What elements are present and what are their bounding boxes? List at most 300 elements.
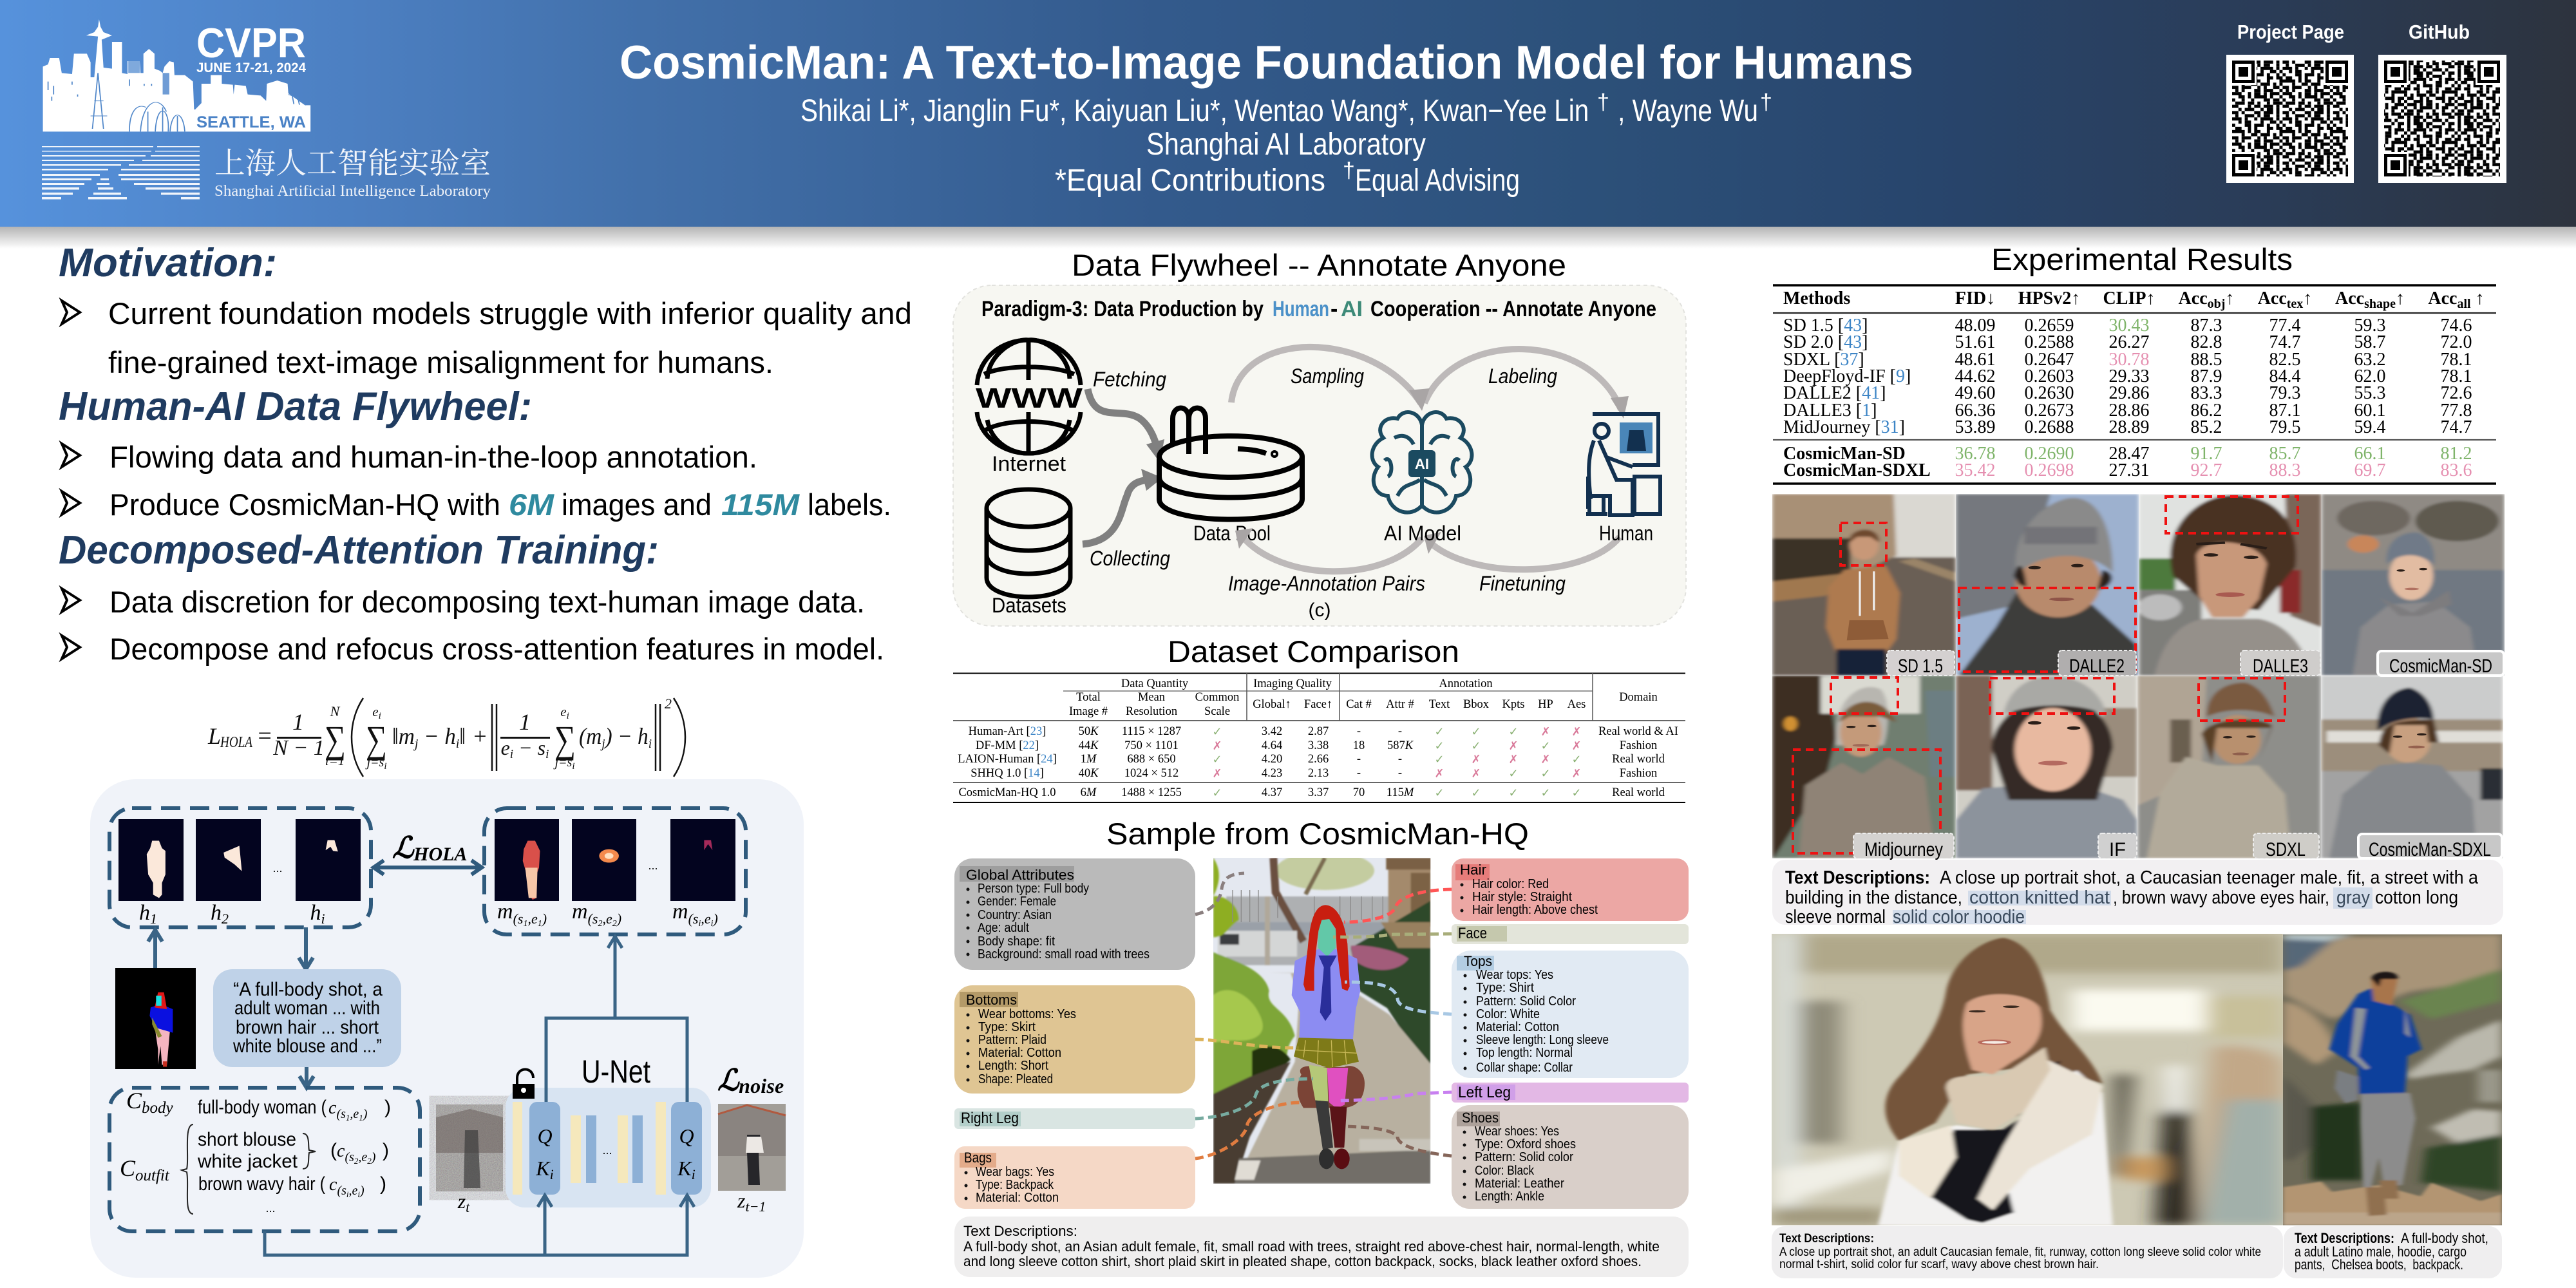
formula: L_HOLA (207, 696, 685, 777)
results rows: 29.86 (2108, 383, 2150, 403)
u-net block: Q (679, 1124, 694, 1148)
method labels: DALLE3 (2253, 656, 2308, 677)
table check and cross marks (1212, 725, 1582, 800)
method labels: SDXL (2266, 839, 2306, 860)
table body: 115M (1387, 786, 1415, 799)
table check and cross marks: ✓ (1471, 725, 1481, 739)
box: global attributes: Country: Asian (978, 908, 1052, 922)
box: global attributes: Background: small road with trees (978, 947, 1150, 961)
box: comparison text description: cotton long (2375, 887, 2458, 908)
table check and cross marks: ✗ (1212, 739, 1222, 753)
table body: 50K (1079, 725, 1099, 738)
dashed box: conditions: C (120, 1155, 135, 1181)
table body: 750 × 1101 (1124, 739, 1179, 752)
bullet: decompose: Decompose and refocus cross-attention features in model. (109, 632, 884, 666)
results rows: 49.60 (1955, 383, 1995, 403)
table body: LAION-Human [24] (958, 753, 1057, 766)
method labels (1853, 650, 2504, 860)
formula: L_HOLA: i (384, 761, 387, 772)
bullet: foundation models: fine-grained text-image misalignment for humans. (108, 345, 773, 379)
formula: L_HOLA: HOLA (220, 734, 252, 751)
formula: L_HOLA: e (501, 736, 510, 759)
caption bubble: “A full-body shot, a (233, 979, 383, 1000)
table check and cross marks: ✓ (1540, 767, 1551, 781)
Shanghai AI Lab logo (42, 146, 491, 200)
table check and cross marks: ✓ (1212, 725, 1222, 739)
QR: project page (2226, 21, 2354, 183)
results rows: 79.3 (2269, 383, 2300, 403)
segmentation map (115, 968, 196, 1069)
results rows: 48.09 (1955, 316, 1995, 336)
table header: Mean (1138, 691, 1165, 704)
formula: L_HOLA: ) − h (604, 723, 649, 749)
table body: CosmicMan-HQ 1.0 (958, 786, 1056, 799)
results rows: 78.1 (2441, 366, 2472, 386)
formula: L_HOLA: j (600, 737, 605, 751)
table body: Real world (1612, 786, 1665, 799)
dashed box: conditions: brown wavy hair ( (198, 1173, 325, 1195)
formula: L_HOLA: 1 (519, 709, 531, 735)
heading: data flywheel: Data Flywheel -- Annotate Anyone (1072, 248, 1566, 282)
u-net block: K (536, 1157, 550, 1180)
photo: z_t-1: t−1 (745, 1198, 766, 1215)
u-net block: Q (537, 1124, 553, 1148)
box: face: Face (1458, 925, 1487, 942)
table check and cross marks: ✗ (1571, 725, 1582, 739)
table check and cross marks: ✓ (1571, 753, 1582, 766)
table check and cross marks: ✓ (1212, 786, 1222, 800)
dashed box: attention maps (484, 808, 746, 934)
dashed box: attention maps: 2 (598, 919, 602, 929)
box: tops: Top length: Normal (1476, 1046, 1573, 1060)
table body: 6M (1081, 786, 1097, 799)
box: woman text description: A close up portrait shot, an adult Caucasian female, fit, runway, cotton long sleeve solid color white (1779, 1245, 2261, 1259)
table header: Imaging Quality (1253, 677, 1332, 690)
table check and cross marks: ✓ (1508, 786, 1519, 800)
results rows: 35.42 (1955, 460, 1995, 480)
results rows: 28.86 (2108, 401, 2150, 421)
formula: L_HOLA: e (560, 704, 567, 719)
results rows: 28.47 (2108, 444, 2150, 464)
bullet: flowing data: Flowing data and human-in-the-loop annotation. (109, 440, 757, 474)
table body: 1488 × 1255 (1121, 786, 1182, 799)
table header: Common (1195, 691, 1239, 704)
results rows: 74.7 (2441, 417, 2472, 437)
table body: 4.37 (1262, 786, 1282, 799)
box: global attributes: Person type: Full body (978, 882, 1089, 896)
QR: project page: Project Page (2237, 21, 2344, 43)
photo: woman with fur scarf (1772, 934, 2283, 1225)
table body: 688 × 650 (1127, 753, 1176, 766)
results rows: 85.2 (2191, 417, 2222, 437)
results header: all (2457, 297, 2471, 311)
dashed box: attention maps: ,e (602, 911, 612, 927)
table header (1069, 677, 1658, 718)
box: shoes (1452, 1105, 1689, 1209)
dashed box: conditions: 1 (346, 1113, 350, 1122)
maps h (118, 819, 361, 901)
box: sample text description: Text Descriptions: (963, 1223, 1077, 1239)
results rows: 0.2647 (2025, 350, 2074, 370)
paradigm title: Cooperation -- Annotate Anyone (1370, 297, 1656, 321)
results rows: 44.62 (1955, 366, 1995, 386)
bullet: foundation models: Current foundation models struggle with inferior quality and (108, 296, 912, 330)
results rows: 91.7 (2191, 444, 2222, 464)
results rows (1783, 316, 2472, 480)
paradigm title (981, 297, 1656, 321)
box: comparison text description: cotton knitted hat (1969, 887, 2110, 908)
arrow: double between maps (374, 860, 482, 875)
table header: Global↑ (1253, 698, 1291, 711)
results header: ↑ (2471, 289, 2485, 308)
results rows: 74.7 (2269, 332, 2300, 352)
arrow: maps to caption (299, 927, 313, 969)
results rows: 48.61 (1955, 350, 1995, 370)
equal contributions note: † (1343, 158, 1355, 183)
table check and cross marks: ✗ (1471, 767, 1481, 781)
table body: 4.23 (1262, 767, 1282, 780)
formula: L_HOLA: i (649, 737, 652, 751)
results header: FID↓ (1955, 289, 1995, 308)
results header: Acc (2335, 289, 2364, 308)
results rows: 78.1 (2441, 350, 2472, 370)
dashed box: conditions: c (337, 1141, 345, 1161)
photo: noisy z_t: z (458, 1189, 466, 1213)
box: woman text description (1772, 1226, 2283, 1278)
bullet: produce (62, 488, 891, 522)
table check and cross marks: ✓ (1508, 767, 1519, 781)
table check and cross marks: ✓ (1540, 786, 1551, 800)
portrait: CosmicMan-SDXL (2321, 676, 2503, 858)
table check and cross marks: ✓ (1471, 739, 1481, 753)
table body: SHHQ 1.0 [14] (971, 767, 1044, 780)
dashed box: attention maps: ) (712, 911, 718, 927)
dashed box: attention maps: i (711, 919, 714, 929)
box: tops: Color: White (1476, 1007, 1540, 1021)
results rows: CosmicMan-SDXL (1783, 460, 1931, 480)
heading: motivation: Motivation: (59, 241, 277, 285)
box: shoes: Type: Oxford shoes (1475, 1137, 1576, 1151)
table check and cross marks: ✗ (1571, 739, 1582, 753)
box: bottoms: Bottoms (966, 992, 1017, 1008)
dashed box: attention maps: m (497, 900, 513, 923)
table body: 40K (1079, 767, 1099, 780)
u-net block: K (677, 1157, 692, 1180)
box: tops: Material: Cotton (1476, 1020, 1559, 1034)
results rows: 30.78 (2108, 350, 2150, 370)
dashed box: human parsing maps: 1 (150, 911, 157, 927)
box: hair (1452, 858, 1689, 921)
table header: HP (1538, 698, 1553, 711)
results rows: 83.6 (2441, 460, 2472, 480)
box: shoes: Shoes (1462, 1110, 1499, 1126)
box: bottoms (954, 985, 1195, 1094)
bullet: produce: 6M (509, 488, 554, 522)
table: dataset comparison (953, 673, 1685, 802)
table header: Attr # (1386, 698, 1414, 711)
loop labels: Image-Annotation Pairs (1228, 572, 1425, 595)
table check and cross marks: ✗ (1540, 753, 1551, 766)
results header: HPSv2↑ (2018, 289, 2080, 308)
label: datasets: Datasets (992, 594, 1066, 617)
box: bottoms: Material: Cotton (978, 1046, 1061, 1060)
results rows: SD 2.0 [43] (1783, 332, 1868, 352)
box: man text description (2284, 1226, 2502, 1278)
results rows: SDXL [37] (1783, 350, 1864, 370)
table body: - (1357, 753, 1361, 766)
table check and cross marks: ✓ (1508, 725, 1519, 739)
box: left leg (1452, 1083, 1689, 1103)
box: man text description: a adult Latino male, hoodie, cargo (2295, 1244, 2467, 1260)
label: L_noise: ℒ (717, 1064, 739, 1097)
equal contributions note: Equal Advising (1355, 164, 1520, 198)
label: AI model: AI Model (1384, 522, 1461, 545)
table header: Domain (1619, 691, 1658, 704)
results header: Acc (2428, 289, 2457, 308)
formula: L_HOLA: i=1 (325, 753, 345, 768)
box: comparison text description (1772, 860, 2503, 927)
dashed box: conditions: ,e (349, 1184, 358, 1198)
icon: globe: WWW (976, 383, 1083, 414)
box: woman text description: Text Descriptions: (1779, 1232, 1874, 1245)
paradigm title: Paradigm-3: Data Production by (981, 297, 1264, 321)
dashed box: attention maps: ,e (701, 911, 711, 927)
table body: Human-Art [23] (969, 725, 1046, 738)
photo: z_t-1 (718, 1104, 786, 1215)
formula: L_HOLA: j=s (554, 755, 572, 770)
box: tops: Pattern: Solid Color (1476, 994, 1576, 1009)
lock icon (513, 1069, 535, 1099)
title: CosmicMan: A Text-to-Image Foundation Model for Humans (620, 37, 1913, 89)
table header: Image # (1069, 705, 1108, 718)
table header: Face↑ (1304, 698, 1332, 711)
method labels: SD 1.5 (1898, 656, 1943, 677)
label: internet: Internet (992, 452, 1066, 475)
table header: Aes (1567, 698, 1586, 711)
box: bags: Bags (964, 1150, 992, 1166)
results rows: 83.3 (2191, 383, 2222, 403)
box: shoes: Color: Black (1475, 1164, 1535, 1178)
box: shoes: Pattern: Solid color (1475, 1150, 1573, 1164)
label: L_HOLA loss: ℒ (392, 831, 413, 864)
label: fetching: Fetching (1093, 368, 1166, 391)
affiliation: Shanghai AI Laboratory (1146, 128, 1426, 162)
CVPR logo: CVPR (196, 19, 306, 66)
authors: Shikai Li*, Jianglin Fu*, Kaiyuan Liu*, Wentao Wang*, Kwan−Yee Lin , Wayne Wu (800, 94, 1758, 128)
formula: L_HOLA: i (510, 748, 513, 761)
loop labels: Labeling (1488, 365, 1557, 388)
results rows: SD 1.5 [43] (1783, 316, 1868, 336)
table body: - (1398, 725, 1402, 738)
dashed box: human parsing maps: i (321, 911, 325, 927)
header shadow (0, 227, 2576, 249)
dashed box: attention maps: ... (648, 859, 658, 872)
table check and cross marks: ✗ (1508, 753, 1519, 766)
heading: sample: Sample from CosmicMan-HQ (1106, 817, 1529, 851)
portrait: IF (1956, 676, 2137, 858)
dashed box: conditions: 2 (367, 1156, 372, 1166)
formula: L_HOLA: j (413, 737, 419, 751)
results rows: 0.2603 (2025, 366, 2074, 386)
icon: human annotator (1586, 414, 1660, 515)
portrait: DALLE2 (1956, 494, 2139, 676)
paradigm title: AI (1341, 297, 1363, 321)
box: tops: Collar shape: Collar (1476, 1061, 1573, 1075)
box: global attributes (954, 858, 1195, 970)
left column text (59, 241, 912, 666)
dashed box: attention maps: (s (513, 911, 523, 927)
dashed box: conditions: outfit (135, 1167, 170, 1184)
arrow: fetching (1088, 389, 1164, 462)
table body: 44K (1079, 739, 1099, 752)
bullet: foundation models (62, 296, 912, 379)
arrows: flywheel loop (1231, 347, 1629, 571)
formula: L_HOLA: ∑ (325, 718, 346, 761)
dashed box: conditions: i (346, 1189, 349, 1199)
dashed box: conditions: ) (359, 1184, 365, 1198)
results header: ↑ (2303, 289, 2312, 308)
dashed box: human parsing maps: h (139, 901, 150, 925)
dashed box: attention maps: m (572, 900, 588, 923)
results rows: 59.3 (2354, 316, 2385, 336)
box: bottoms: Type: Skirt (978, 1020, 1036, 1034)
table body: Fashion (1620, 767, 1657, 780)
box: bottoms: Shape: Pleated (978, 1072, 1053, 1086)
label: L_noise: noise (739, 1074, 784, 1097)
dashed box: conditions: C (126, 1088, 142, 1113)
formula: L_HOLA: ∑ (554, 718, 576, 761)
dashed box: attention maps: 1 (523, 919, 527, 929)
table check and cross marks: ✗ (1434, 767, 1444, 781)
label: data pool: Data Pool (1193, 522, 1271, 545)
dashed box: conditions: ) (384, 1097, 391, 1118)
dashed box: conditions: (s (337, 1184, 346, 1198)
results rows: 86.2 (2191, 401, 2222, 421)
results rows: 74.6 (2441, 316, 2472, 336)
results rows: 82.8 (2191, 332, 2222, 352)
results rows: 0.2659 (2025, 316, 2074, 336)
box: hair: Hair color: Red (1472, 877, 1549, 891)
bullet: produce: images and (562, 488, 712, 522)
box: shoes: Material: Leather (1475, 1177, 1564, 1191)
formula: L_HOLA: ‖ (459, 723, 466, 749)
box: face (1452, 924, 1689, 944)
table body: Real world (1612, 753, 1665, 766)
results rows: MidJourney [31] (1783, 417, 1905, 437)
box: man text description: pants, Chelsea boots, backpack. (2295, 1256, 2463, 1273)
results rows: 0.2588 (2025, 332, 2074, 352)
box: tops: Sleeve length: Long sleeve (1476, 1033, 1609, 1047)
portrait: Midjourney (1772, 676, 1956, 858)
dashed box: attention maps: ,e (527, 911, 538, 927)
box: comparison text description: , brown wavy above eyes hair, (2113, 887, 2329, 908)
box: sample text description (954, 1217, 1689, 1277)
dashed box: conditions: ( (330, 1140, 337, 1161)
dashed box: attention maps: (s (588, 911, 598, 927)
table header: Bbox (1463, 698, 1490, 711)
box: man text description: Text Descriptions: (2295, 1230, 2394, 1246)
results rows: 0.2698 (2025, 460, 2074, 480)
results rows: 92.7 (2191, 460, 2222, 480)
results rows: 85.7 (2269, 444, 2300, 464)
box: tops: Wear tops: Yes (1476, 968, 1553, 982)
box: hair: Hair length: Above chest (1472, 903, 1598, 917)
table body: 1024 × 512 (1124, 767, 1179, 780)
header banner (0, 0, 2576, 227)
results rows: DeepFloyd-IF [9] (1783, 366, 1911, 386)
u-net block: U-Net (582, 1054, 650, 1090)
table check and cross marks: ✓ (1471, 786, 1481, 800)
results rows: 63.2 (2354, 350, 2385, 370)
table header: Text (1429, 698, 1450, 711)
table header: Kpts (1502, 698, 1524, 711)
dashed box: attention maps: (s (688, 911, 698, 927)
box: tops (1452, 951, 1689, 1078)
table body: 2.66 (1308, 753, 1329, 766)
results header: shape (2364, 297, 2396, 311)
results header: ↑ (2396, 289, 2405, 308)
method labels: CosmicMan-SDXL (2369, 839, 2491, 860)
Shanghai AI Lab logo: 上海人工智能实验室 (214, 147, 491, 180)
results rows: 79.5 (2269, 417, 2300, 437)
u-net block: ... (602, 1144, 612, 1157)
table header: Annotation (1439, 677, 1493, 690)
results rows: 87.1 (2269, 401, 2300, 421)
formula: L_HOLA: 1 (292, 709, 304, 735)
label: human: Human (1599, 522, 1653, 545)
arrow: segmentation to maps (148, 930, 162, 968)
results rows: 59.4 (2354, 417, 2385, 437)
icon: globe (976, 340, 1083, 453)
table body: - (1357, 767, 1361, 780)
left annotation boxes (954, 858, 1195, 1209)
results rows: CosmicMan-SD (1783, 444, 1906, 464)
icon: AI brain: AI (1415, 456, 1429, 472)
table check and cross marks: ✓ (1571, 786, 1582, 800)
box: hair: Hair style: Straight (1472, 890, 1572, 904)
icon: data pool (1159, 408, 1302, 519)
arrow: caption to conditions (299, 1067, 314, 1088)
box: global attributes: Gender: Female (978, 895, 1056, 909)
results rows: 0.2630 (2025, 383, 2074, 403)
results rows: 66.1 (2354, 444, 2385, 464)
table body: - (1398, 767, 1402, 780)
box: woman text description: normal t-shirt, solid color fur scarf, wavy above chest brown hair. (1779, 1258, 2099, 1271)
bullet: produce: 115M (721, 488, 800, 522)
Shanghai AI Lab logo: Shanghai Artificial Intelligence Laboratory (214, 183, 491, 200)
bullet: produce: labels. (808, 488, 891, 522)
box: tops: Tops (1464, 953, 1492, 969)
box: bags (954, 1146, 1195, 1209)
loop labels: Finetuning (1479, 572, 1566, 595)
results header: Methods (1783, 289, 1850, 308)
portrait: SDXL (2137, 676, 2321, 858)
paradigm title: - (1331, 297, 1338, 321)
table header: Cat # (1346, 698, 1372, 711)
results rows: 60.1 (2354, 401, 2385, 421)
box: right leg (954, 1108, 1195, 1129)
dashed box: conditions: ,e (350, 1107, 359, 1121)
results rows: 51.61 (1955, 332, 1995, 352)
results rows: DALLE2 [41] (1783, 383, 1886, 403)
dashed box: human parsing maps: h (310, 901, 321, 925)
results rows: 29.33 (2108, 366, 2150, 386)
formula: L_HOLA: i (567, 711, 569, 721)
dashed box: conditions: c (328, 1098, 336, 1118)
dashed box: attention maps: 2 (612, 919, 617, 929)
formula: L_HOLA: i (456, 737, 459, 751)
label: L_HOLA loss: HOLA (413, 844, 467, 865)
